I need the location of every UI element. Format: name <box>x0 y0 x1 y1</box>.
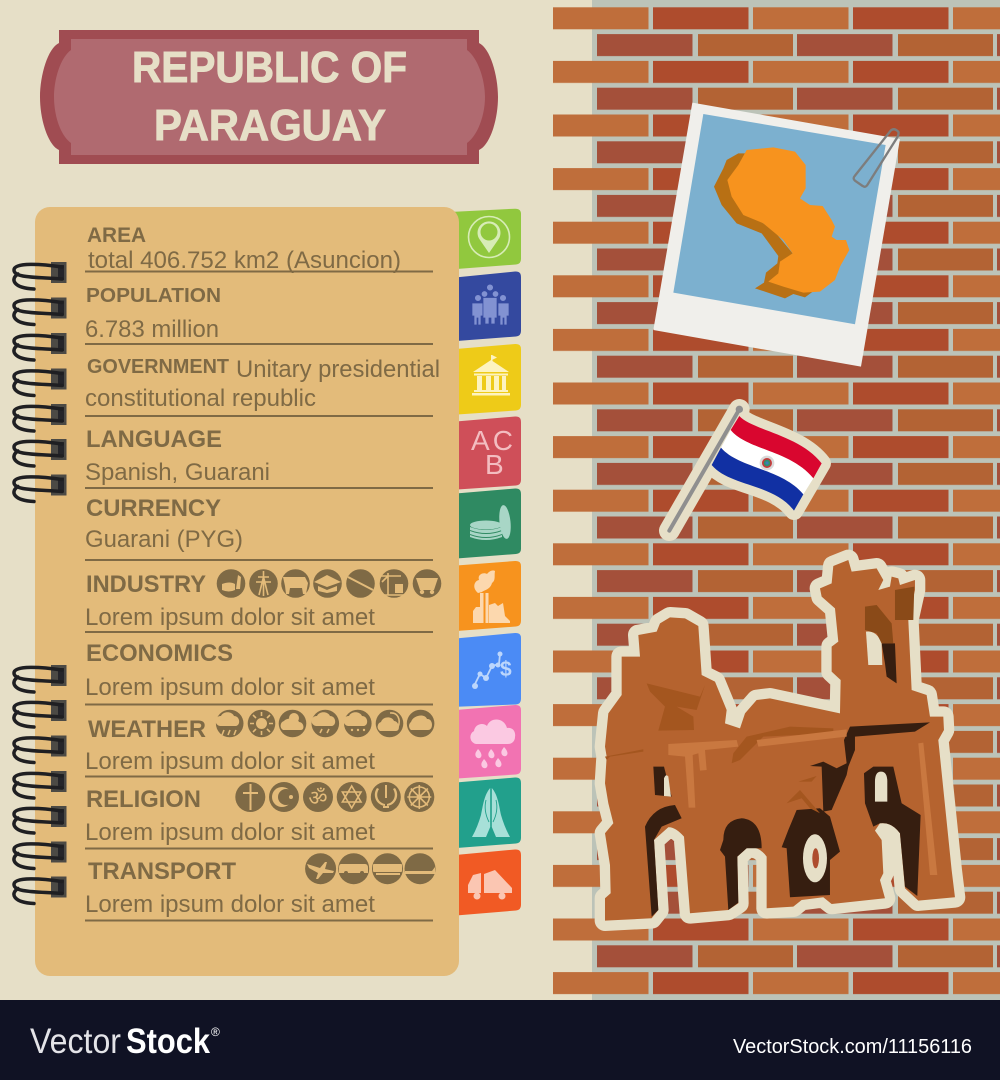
tab: language: AC <box>471 425 513 456</box>
dark arch interiors <box>645 643 930 917</box>
population row: 6.783 million <box>85 316 219 343</box>
area row: total 406.752 km2 (Asuncion) <box>88 247 401 274</box>
wall details <box>605 587 937 875</box>
title text: REPUBLIC OF <box>132 43 407 92</box>
photo blue background <box>673 114 886 324</box>
tab: population <box>450 271 521 342</box>
image id: VectorStock.com/11156116 <box>733 1036 972 1058</box>
government row: GOVERNMENT <box>87 356 229 378</box>
religion row: Lorem ipsum dolor sit amet <box>85 819 375 846</box>
area row <box>85 224 433 274</box>
title text: PARAGUAY <box>154 101 386 150</box>
religion row: RELIGION <box>86 786 201 813</box>
population row: POPULATION <box>86 284 221 307</box>
VectorStock logo: ® <box>211 1025 220 1039</box>
ruined church illustration <box>605 560 955 921</box>
tab: language <box>450 416 521 490</box>
tab: currency <box>450 488 521 559</box>
area row: AREA <box>87 224 146 247</box>
tab: religion <box>450 777 521 848</box>
economics row: ECONOMICS <box>86 640 233 667</box>
VectorStock logo: Vector <box>30 1022 121 1061</box>
transport row: TRANSPORT <box>88 858 236 885</box>
weather row: WEATHER <box>88 716 206 743</box>
flag stripes <box>712 416 822 511</box>
religion icons <box>235 782 434 812</box>
brick wall <box>553 0 1000 1000</box>
language row: LANGUAGE <box>86 426 222 453</box>
tab: area <box>450 209 521 270</box>
spiral binding: lower group <box>14 665 66 904</box>
industry row <box>85 569 441 632</box>
tab: transport <box>450 849 521 916</box>
polaroid photo with map <box>653 103 900 367</box>
tab: weather <box>450 705 521 779</box>
industry icons <box>217 569 441 598</box>
government row: Unitary presidential <box>236 356 440 383</box>
industry row: Lorem ipsum dolor sit amet <box>85 604 375 631</box>
government row: constitutional republic <box>85 385 316 412</box>
photo frame <box>653 103 900 367</box>
VectorStock logo: Stock <box>126 1022 210 1061</box>
religion row <box>85 782 434 848</box>
map of Paraguay <box>727 147 849 293</box>
flag sticker outline <box>669 409 822 531</box>
transport row <box>85 853 436 920</box>
tab: language: B <box>485 449 504 480</box>
VectorStock logo <box>30 1022 220 1061</box>
title banner <box>40 30 498 164</box>
transport icons <box>305 853 436 884</box>
tab: economics: $ <box>500 658 512 681</box>
currency row <box>85 495 433 560</box>
title text <box>132 43 407 150</box>
weather icons <box>215 710 434 737</box>
notebook page <box>35 207 459 976</box>
language row: Spanish, Guarani <box>85 459 270 486</box>
flag of Paraguay <box>669 406 822 531</box>
language row <box>85 426 433 488</box>
cream openings <box>664 631 887 882</box>
religion icons: ॐ <box>308 787 328 810</box>
weather row: Lorem ipsum dolor sit amet <box>85 748 375 775</box>
paper clip <box>854 129 899 187</box>
currency row: Guarani (PYG) <box>85 526 243 553</box>
tab: economics <box>450 633 521 707</box>
tab: government <box>450 344 521 415</box>
population row <box>85 284 433 344</box>
church sticker body <box>605 560 955 921</box>
transport row: Lorem ipsum dolor sit amet <box>85 891 375 918</box>
tab: industry <box>450 561 521 632</box>
flag pole <box>669 409 739 531</box>
economics row <box>85 640 433 704</box>
map shadow <box>714 153 815 298</box>
government row <box>85 356 440 416</box>
weather row <box>85 710 434 776</box>
economics row: Lorem ipsum dolor sit amet <box>85 674 375 701</box>
footer bar <box>0 1000 1000 1080</box>
currency row: CURRENCY <box>86 495 221 522</box>
industry row: INDUSTRY <box>86 571 206 598</box>
spiral binding: upper group <box>14 262 66 502</box>
category tabs <box>450 209 521 916</box>
